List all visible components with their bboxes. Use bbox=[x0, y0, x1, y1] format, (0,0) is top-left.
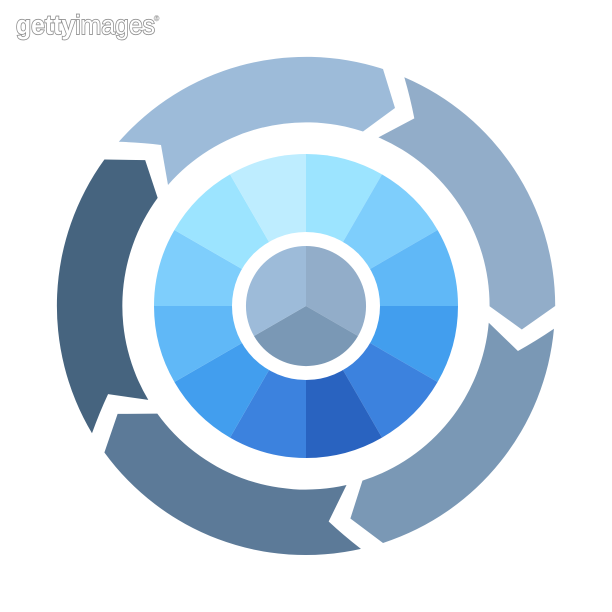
arrow 5: left bbox=[11, 144, 218, 447]
arrow 1: top bbox=[119, 57, 395, 185]
arrow 4: bottom left bbox=[88, 352, 386, 612]
wheel wedge 6 bbox=[306, 306, 382, 458]
arrow 3: lower right bbox=[305, 294, 604, 560]
hub sector: upper right bbox=[306, 246, 366, 336]
white hub ring bbox=[232, 232, 380, 380]
central hub pie bbox=[246, 246, 366, 366]
wheel wedge 7 bbox=[230, 306, 306, 458]
wheel wedge 9 bbox=[154, 306, 306, 382]
blue segmented wheel bbox=[154, 154, 458, 458]
hub sector: upper left bbox=[246, 246, 306, 336]
wheel wedge 5 bbox=[306, 306, 438, 438]
watermark logo: ® bbox=[154, 15, 160, 23]
arrow 2: right bbox=[363, 51, 570, 353]
wheel wedge 4 bbox=[306, 306, 458, 382]
wheel wedge 8 bbox=[174, 306, 306, 438]
wheel wedge 11 bbox=[174, 174, 306, 306]
wheel wedge 3 bbox=[306, 230, 458, 306]
wheel wedge 12 bbox=[230, 154, 306, 306]
wheel wedge 2 bbox=[306, 174, 438, 306]
watermark logo: gettyimages bbox=[16, 10, 155, 40]
hub sector: bottom bbox=[254, 306, 358, 366]
wheel wedge 1 bbox=[306, 154, 382, 306]
wheel wedge 10 bbox=[154, 230, 306, 306]
